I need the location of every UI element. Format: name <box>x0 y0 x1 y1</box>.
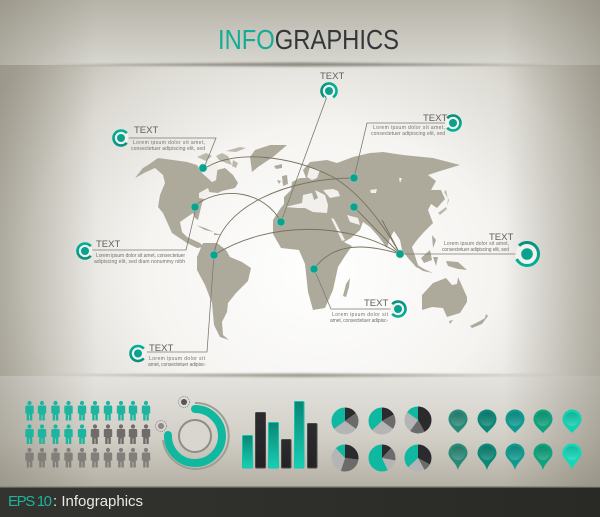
label: TEXT <box>96 239 120 250</box>
map pins <box>191 164 404 273</box>
target icon <box>319 81 339 101</box>
bar chart <box>242 402 317 468</box>
Hudson Bay <box>200 160 218 182</box>
pie 3 <box>411 413 425 427</box>
flight arcs <box>197 157 400 269</box>
target icon <box>74 240 96 262</box>
Afro-Eurasia <box>273 152 460 310</box>
world map <box>135 145 488 340</box>
Black Sea <box>323 189 340 198</box>
pie 5 <box>375 451 389 465</box>
row 2 <box>448 444 582 470</box>
Madagascar <box>343 278 350 297</box>
footer text: EPS 10 <box>8 493 52 510</box>
Baltic <box>307 167 320 180</box>
target icon <box>387 298 409 320</box>
callout: south africa <box>330 298 409 324</box>
Arctic islands <box>197 147 246 168</box>
Iceland <box>274 164 282 169</box>
bottom divider <box>50 374 560 377</box>
callout: top <box>319 71 344 101</box>
pie 6 <box>411 451 425 465</box>
inland seas <box>199 160 402 241</box>
target icon <box>110 127 132 149</box>
Caspian and Baikal <box>370 178 402 193</box>
Mediterranean <box>285 190 328 213</box>
description: Lorem ipsum dolor sit amet, <box>133 140 205 146</box>
pie 2 <box>375 414 389 428</box>
callout: south america <box>127 343 206 368</box>
row 1 <box>25 401 150 420</box>
footer bar <box>0 486 600 517</box>
label: TEXT <box>423 113 447 124</box>
callout: central america <box>74 239 185 265</box>
North America <box>135 158 238 248</box>
row 1 <box>448 410 582 433</box>
target icon <box>442 112 464 134</box>
location pin icons <box>448 410 582 470</box>
Caribbean islands <box>196 225 222 235</box>
South America <box>197 243 251 340</box>
Great Britain <box>277 175 288 186</box>
people pictogram <box>25 401 150 468</box>
target icon <box>127 343 149 364</box>
Persian Gulf <box>347 215 360 225</box>
New Zealand <box>449 314 488 328</box>
description: adipiscing elit, sed diam nonummy nibh <box>94 259 185 265</box>
pie 4 <box>338 451 352 465</box>
pie 1 <box>338 414 352 428</box>
top divider <box>45 62 562 66</box>
label: TEXT <box>364 298 388 309</box>
callout: north america <box>110 125 205 152</box>
pie charts <box>338 413 425 465</box>
footer text: : Infographics <box>53 493 143 510</box>
description: Lorem ipsum dolor sit amet, <box>373 125 445 131</box>
description: Lorem ipsum dolor sit <box>332 312 389 318</box>
description: Lorem ipsum dolor sit amet, <box>444 241 509 247</box>
target icon <box>511 238 543 270</box>
description: consectetuer adipiscing elit, sed <box>371 131 445 137</box>
row 2 <box>25 424 150 444</box>
label: TEXT <box>149 343 173 354</box>
small icon top <box>178 396 190 408</box>
Japan <box>438 190 449 215</box>
description: amet, consectetuer adipisc- <box>148 362 206 368</box>
description: consectetuer adipiscing elit, sed <box>131 146 205 152</box>
description: Lorem ipsum dolor sit <box>149 356 206 362</box>
Red Sea <box>331 218 345 241</box>
description: amet, consectetuer adipisc- <box>330 318 388 324</box>
title: INFOGRAPHICS <box>218 24 399 55</box>
Great Lakes <box>199 188 210 199</box>
label: TEXT <box>489 232 513 243</box>
bottom band <box>0 376 600 487</box>
leader lines <box>90 91 516 352</box>
top band <box>0 0 600 65</box>
description: consectetuer adipiscing elit, sed <box>442 247 509 253</box>
Greenland <box>250 145 287 172</box>
callout: russia <box>371 112 464 137</box>
Australia <box>422 277 467 317</box>
small icon left <box>156 420 166 432</box>
callout: south asia <box>442 232 543 270</box>
label: TEXT <box>134 125 158 136</box>
row 3 <box>25 448 150 468</box>
label: TEXT <box>320 71 344 82</box>
description: Lorem ipsum dolor sit amet, consectetuer <box>96 253 185 259</box>
Indonesia <box>413 235 467 273</box>
donut gauge <box>156 396 229 469</box>
